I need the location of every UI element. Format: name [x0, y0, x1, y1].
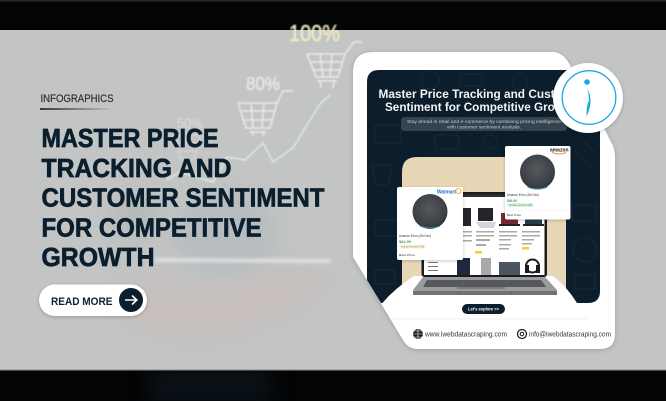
- background: 80% cart: [238, 91, 293, 136]
- main heading: FOR COMPETITIVE: [42, 212, 262, 242]
- main heading: MASTER PRICE: [42, 123, 218, 153]
- walmart logo: Walmart: [437, 190, 456, 196]
- lower product row: [457, 258, 470, 275]
- explore button: [462, 304, 505, 314]
- icon: globe: [413, 329, 423, 339]
- category label: INFOGRAPHICS: [40, 93, 114, 105]
- tan backdrop: [402, 157, 566, 300]
- walmart product card: Neutral Sentiment (78): [401, 246, 424, 248]
- background: 50% cart: [175, 135, 200, 158]
- amazon logo: amazon: [550, 148, 569, 154]
- main heading: CUSTOMER SENTIMENT: [42, 182, 325, 212]
- walmart product card: [397, 187, 463, 260]
- icon: at sign: [518, 330, 526, 338]
- amazon product card: Positive Sentiment (85): [509, 204, 532, 207]
- walmart product card: Amazon Echo (4th Gen): [399, 234, 431, 238]
- panel heading: [378, 89, 584, 114]
- laptop: [413, 192, 557, 295]
- panel subtitle pill: with customer sentiment analysis.: [447, 124, 521, 129]
- footer email: info@iwebdatascraping.com: [529, 332, 611, 338]
- background: 100% label: 100%: [289, 20, 340, 46]
- main heading: [42, 123, 325, 272]
- card background: [353, 52, 615, 349]
- pedestal lower edge: [391, 318, 588, 320]
- background: growth line: [167, 95, 330, 182]
- preview card: [353, 52, 623, 349]
- background: hand-held tablet: [155, 260, 331, 261]
- laptop base: [413, 277, 557, 295]
- laptop screen: [422, 192, 547, 277]
- footer website: www.iwebdatascraping.com: [424, 332, 507, 338]
- background: 80% label: 80%: [246, 74, 280, 94]
- footer website: [413, 329, 507, 339]
- amazon product card: Best Price: [507, 213, 521, 217]
- read more button: [39, 284, 147, 316]
- dark panel: [367, 70, 600, 303]
- walmart product card: $84.99: [399, 240, 411, 244]
- panel heading: Sentiment for Competitive Growth: [385, 102, 575, 114]
- amazon product card: Amazon Echo (4th Gen): [507, 193, 539, 197]
- white pedestal: [382, 276, 588, 322]
- category underline: [40, 108, 114, 110]
- panel subtitle pill: Stay ahead in retail and e-commerce by combining pricing intelligence: [407, 119, 561, 124]
- background: 50% label: 50%: [177, 115, 202, 131]
- explore button: Let's explore >>: [468, 306, 499, 312]
- amazon product card: $84.99: [507, 199, 517, 203]
- main heading: GROWTH: [42, 242, 154, 272]
- background: 100% cart: [307, 42, 362, 88]
- footer email: [518, 330, 611, 338]
- read more button: READ MORE: [51, 296, 112, 308]
- panel heading: Master Price Tracking and Customer: [378, 89, 584, 101]
- product row: [463, 208, 471, 226]
- walmart product card: Best Price: [399, 253, 415, 257]
- brand logo: [553, 63, 623, 133]
- panel subtitle pill: [401, 117, 567, 131]
- smart speaker: [520, 154, 555, 190]
- smart speaker: [412, 194, 448, 229]
- amazon product card: [505, 146, 570, 220]
- main heading: TRACKING AND: [42, 153, 232, 183]
